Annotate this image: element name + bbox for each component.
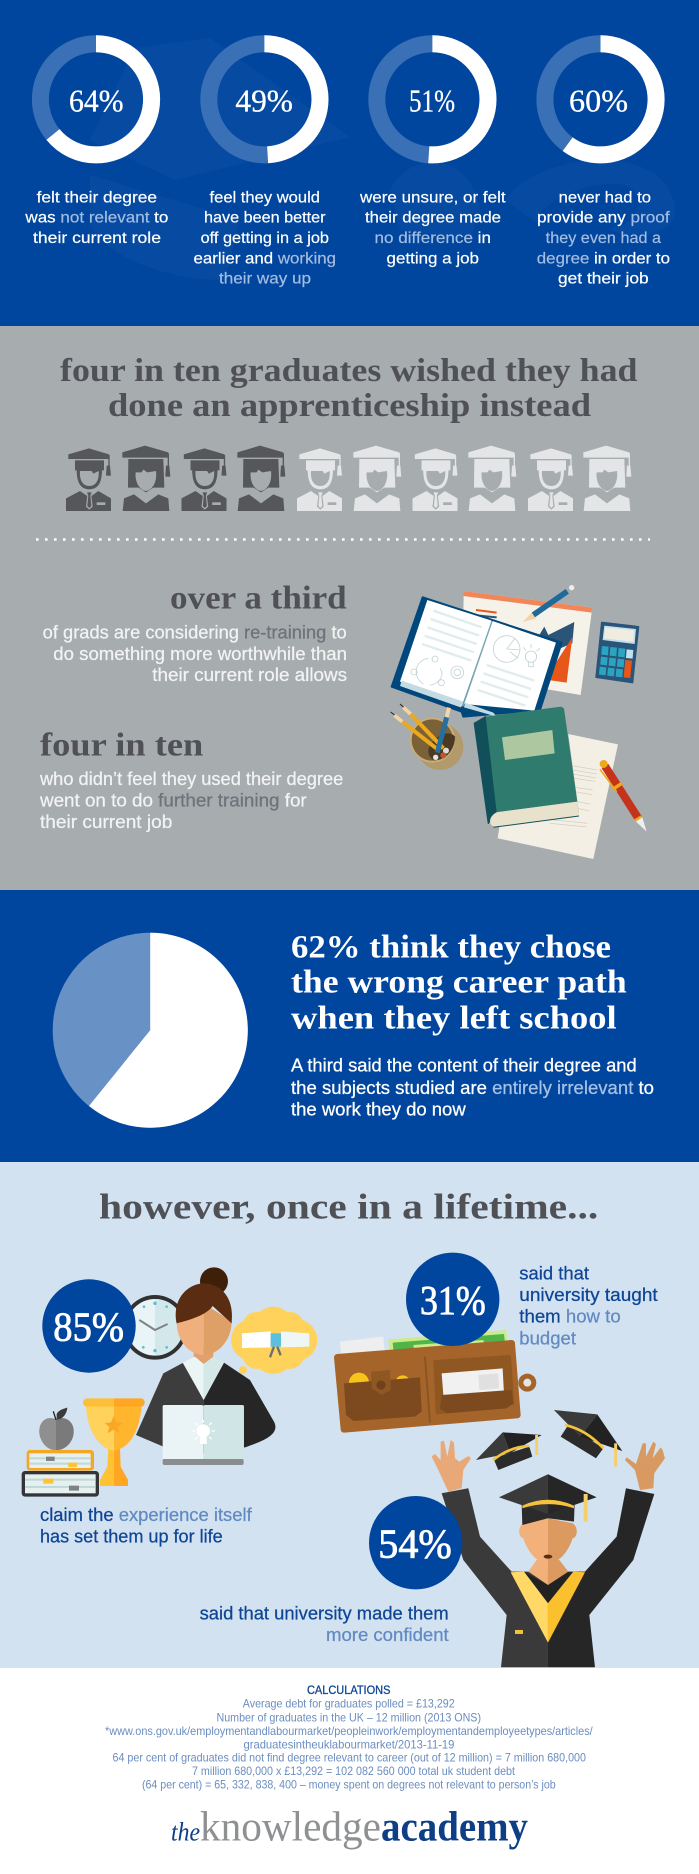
donut: 49% <box>209 44 320 155</box>
text: calculations: 64 per cent of graduates did not find degree relevant to career (out of 12 million) = 7 million 680,000 <box>112 1751 586 1765</box>
panel: once in a lifetime <box>0 1162 699 1668</box>
logo: the knowledge academy: the <box>171 1818 200 1847</box>
badge: 85%: 85% <box>53 1304 124 1350</box>
text: column 2: off getting in a job <box>201 230 329 247</box>
heading: apprenticeship: done an apprenticeship instead <box>108 388 591 424</box>
badge: 54%: 54% <box>378 1521 452 1567</box>
text: calculations: graduatesintheuklabourmarket/2013-11-19 <box>244 1737 455 1751</box>
heading: 62% wrong path: when they left school <box>291 1000 617 1036</box>
logo: the knowledge academy: knowledge <box>200 1805 381 1851</box>
thrown cap right <box>554 1410 622 1467</box>
icons: six light graduates <box>297 446 631 511</box>
head and neck <box>519 1518 577 1585</box>
text: four in ten: their current job <box>40 812 172 832</box>
text: calculations: *www.ons.gov.uk/employmentandlabourmarket/peopleinwork/employmentandemployeetypes/articles/ <box>105 1724 593 1738</box>
donut: 51% <box>377 44 488 155</box>
pie chart: 62% <box>53 933 248 1128</box>
text: column 3: their degree made <box>365 210 501 227</box>
donut: 64% <box>40 44 152 155</box>
text: column 3: no difference in <box>374 230 491 247</box>
illustration: desk with books and stationery <box>391 585 647 859</box>
text: how to budget: said that <box>519 1263 589 1283</box>
chart paper <box>463 591 592 695</box>
manuscript paper <box>498 734 618 859</box>
text: more confident <box>200 1603 449 1645</box>
text: column 4: provide any proof <box>537 210 670 227</box>
text: column 4: never had to <box>559 190 651 207</box>
donut: 49%: 49% <box>235 82 293 118</box>
badge: 31% <box>406 1253 499 1346</box>
text: over a third <box>43 580 347 685</box>
heading: apprenticeship <box>60 353 638 424</box>
text: column 3 <box>359 190 506 267</box>
text: more confident: more confident <box>326 1625 449 1645</box>
text: over a third: do something more worthwhile than <box>53 644 347 664</box>
heading: 62% wrong path: the wrong career path <box>291 965 627 1001</box>
text: calculations: Average debt for graduates polled = £13,292 <box>243 1697 455 1711</box>
text: experience itself <box>40 1505 253 1547</box>
donut: 64%: 64% <box>69 82 124 118</box>
text: calculations <box>105 1683 593 1791</box>
panel: apprenticeship and training <box>0 326 699 890</box>
text: more confident: said that university made them <box>200 1603 449 1623</box>
apple on books <box>22 1408 99 1497</box>
logo: the knowledge academy <box>171 1805 528 1851</box>
illustration: wallet <box>337 1330 536 1429</box>
heading: 62% wrong path <box>291 929 627 1036</box>
text: column 3: were unsure, or felt <box>359 190 506 207</box>
donut: 60% <box>545 44 656 155</box>
trophy <box>83 1398 145 1486</box>
text: column 3: getting a job <box>386 250 479 267</box>
clock <box>123 1295 187 1360</box>
open notebook <box>392 597 562 717</box>
text: four in ten: went on to do further training for <box>39 791 307 811</box>
text: experience itself: has set them up for life <box>40 1527 223 1547</box>
text: four in ten <box>39 727 343 832</box>
text: how to budget: budget <box>519 1328 576 1348</box>
thrown cap left <box>476 1432 542 1470</box>
text: how to budget: them how to <box>519 1307 621 1327</box>
gown <box>442 1488 654 1667</box>
calculator <box>596 622 639 683</box>
text: over a third: their current role allows <box>152 665 347 685</box>
logo: the knowledge academy: academy <box>381 1805 528 1851</box>
text: experience itself: claim the experience itself <box>40 1505 253 1525</box>
text: column 4: degree in order to <box>537 250 670 267</box>
text: a third said: the subjects studied are entirely irrelevant to <box>291 1078 654 1098</box>
donut: 60%: 60% <box>569 82 628 118</box>
text: column 2: have been better <box>204 210 326 227</box>
badge: 85% <box>42 1279 136 1373</box>
text: four in ten: who didn’t feel they used their degree <box>39 769 343 789</box>
text: over a third: over a third <box>170 580 347 616</box>
text: column 1: was not relevant to <box>24 210 168 227</box>
text: a third said: the work they do now <box>291 1100 467 1120</box>
panel: survey statistics <box>0 0 699 326</box>
text: column 1: their current role <box>33 230 161 247</box>
text: over a third: of grads are considering re-training to <box>43 622 347 642</box>
illustration: graduate with thrown caps <box>432 1410 665 1667</box>
watermark: graduation cap <box>90 38 675 280</box>
text: calculations: 7 million 680,000 x £13,292 = 102 082 560 000 total uk student debt <box>192 1764 516 1778</box>
hands <box>432 1440 665 1492</box>
fountain pen <box>600 760 647 832</box>
text: how to budget <box>519 1263 658 1348</box>
text: calculations: CALCULATIONS <box>307 1683 390 1697</box>
text: calculations: Number of graduates in the UK – 12 million (2013 ONS) <box>216 1710 481 1724</box>
text: how to budget: university taught <box>519 1285 658 1305</box>
text: column 2: their way up <box>219 270 311 287</box>
text: a third said <box>291 1056 654 1120</box>
green book <box>474 707 579 827</box>
heading: 62% wrong path: 62% think they chose <box>291 929 611 965</box>
mortarboard <box>499 1474 597 1525</box>
illustration: woman with laptop, trophy and books <box>22 1267 317 1497</box>
panel: calculations and logo <box>0 1668 699 1874</box>
text: column 1: felt their degree <box>37 190 157 207</box>
panel: wrong career path <box>0 890 699 1162</box>
text: column 2: earlier and working <box>194 250 336 267</box>
text: calculations: (64 per cent) = 65, 332, 838, 400 – money spent on degrees not relevant to person’s job <box>142 1777 556 1791</box>
badge: 31%: 31% <box>420 1277 486 1323</box>
thought cloud with diploma <box>231 1307 317 1385</box>
donut: 51%: 51% <box>409 82 455 118</box>
text: a third said: A third said the content of their degree and <box>291 1056 637 1076</box>
pencil cup <box>391 704 463 770</box>
laptop <box>163 1405 244 1465</box>
text: column 4: they even had a <box>546 230 661 247</box>
icons: four dark graduates <box>66 446 285 511</box>
text: column 1 <box>24 190 168 247</box>
text: column 4: get their job <box>558 270 649 287</box>
text: column 2: feel they would <box>210 190 320 207</box>
heading: apprenticeship: four in ten graduates wished they had <box>60 353 638 389</box>
text: four in ten: four in ten <box>40 727 203 763</box>
person <box>136 1267 275 1453</box>
blue pencil <box>523 585 574 622</box>
heading: however: however, once in a lifetime... <box>99 1186 598 1226</box>
text: column 2 <box>194 190 336 287</box>
text: column 4 <box>537 190 670 287</box>
badge: 54% <box>369 1496 462 1589</box>
